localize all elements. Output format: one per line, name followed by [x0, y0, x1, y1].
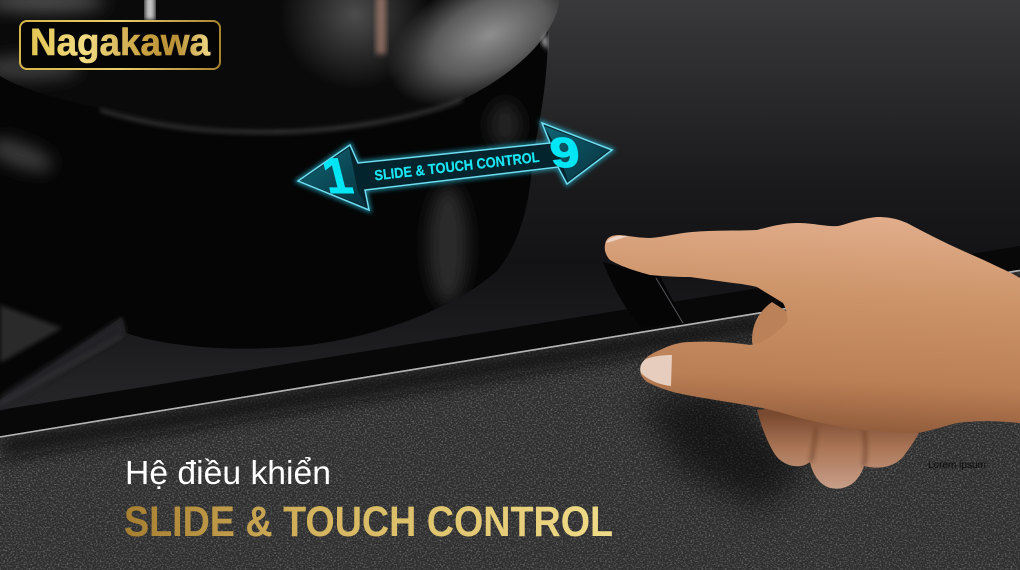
- logo: Nagakawa: Nagakawa: [30, 22, 211, 64]
- curled middle finger: [752, 302, 800, 349]
- arrow number 1: 1: [317, 148, 358, 204]
- arrow label: SLIDE & TOUCH CONTROL: [374, 150, 541, 184]
- thumb nail: [640, 355, 672, 386]
- hand pressing the control: [603, 217, 1020, 489]
- double arrow: slide and touch control: [298, 123, 612, 210]
- back fingers: [757, 405, 920, 489]
- small caption: Lorem ipsum: Lorem ipsum: [928, 460, 986, 471]
- index nail highlight: [606, 236, 628, 243]
- heading: Slide & Touch Control: SLIDE & TOUCH CONTROL: [124, 498, 613, 546]
- cooktop front bezel and edge: [0, 246, 1020, 437]
- countertop stone: [0, 260, 1020, 570]
- subtitle: Hệ điều khiển: Hệ điều khiển: [125, 454, 331, 491]
- cooking pot: [0, 0, 580, 132]
- hand and index finger: [605, 217, 1020, 433]
- arrow number 9: 9: [547, 129, 582, 176]
- finger shadow on glass: [603, 262, 684, 328]
- burner and pot lower body: [0, 31, 548, 402]
- glass cooktop surface: [0, 0, 1020, 437]
